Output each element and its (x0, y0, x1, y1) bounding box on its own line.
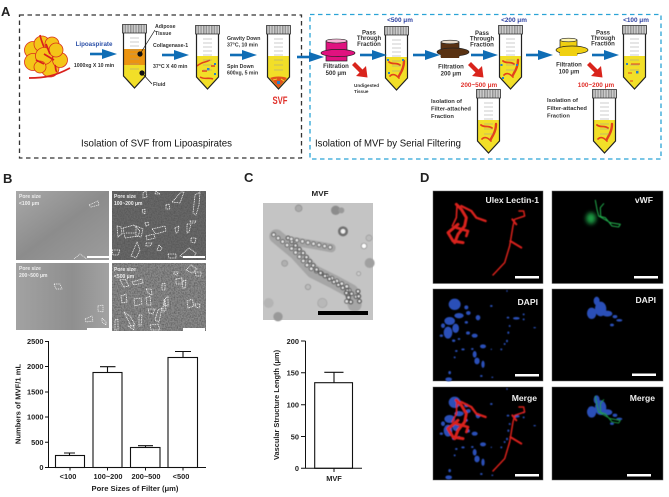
schematic step labels (74, 17, 649, 120)
value axis labels: 200 (287, 337, 299, 346)
value axis labels: 100 (287, 400, 299, 410)
image title: MVF (312, 189, 329, 198)
micrograph: pore size under 100 (16, 191, 109, 260)
schematic step labels: 100~200 μm (578, 82, 615, 89)
tube: SVF pellet (266, 26, 290, 89)
micrograph: pore size 200-500 (16, 263, 109, 330)
value axis labels: 50 (291, 432, 299, 441)
micrograph: pore size 100-200: 100~200 μm (114, 201, 143, 207)
schematic step labels: 600xg, 5 min (227, 70, 258, 76)
schematic step labels: Lipoaspirate (76, 41, 113, 48)
schematic step labels: Filter-attached (431, 106, 471, 112)
image: vWF: vWF (635, 195, 653, 205)
schematic step labels: Filtration (438, 64, 464, 70)
icon: 200 um filter (437, 40, 469, 58)
y axis title: Numbers of MVF/1 mL (14, 364, 22, 444)
schematic step labels: SVF (272, 95, 288, 107)
heading: isolation of MVF: Isolation of MVF by Serial Filtering (315, 138, 461, 150)
panel label C: C (244, 170, 254, 185)
tube: collagenase digestion (196, 26, 220, 89)
micrograph: pore size 200-500: 200~500 μm (19, 273, 48, 279)
panel: isolation of SVF (20, 15, 302, 158)
schematic step labels: 1000xg X 10 min (74, 63, 114, 69)
image: Ulex Lectin-1: Ulex Lectin-1 (486, 195, 539, 205)
value axis labels (27, 337, 44, 472)
schematic step labels: Gravity Down (227, 36, 260, 42)
schematic step labels: Tissue (155, 31, 171, 37)
micrograph: pore size under 500 (112, 263, 206, 331)
image: Ulex Lectin-1 (433, 191, 543, 284)
schematic step labels: Pass (475, 31, 490, 37)
panel label A: A (1, 4, 11, 19)
category labels: 100~200 (94, 472, 122, 481)
image: merge left (433, 387, 543, 480)
schematic step labels: Fraction (431, 114, 454, 120)
schematic step labels: Adipose (155, 24, 176, 30)
schematic step labels: Through (591, 36, 615, 42)
schematic step labels: Fraction (547, 114, 570, 120)
category labels: <100 (60, 472, 76, 481)
axes (301, 341, 362, 472)
value axis labels: 500 (31, 438, 44, 447)
schematic step labels: Pass (596, 30, 611, 36)
schematic step labels: <500 μm (387, 17, 413, 24)
micrograph: pore size 100-200 (112, 191, 206, 260)
schematic step labels: 100 μm (559, 70, 579, 76)
bars (56, 352, 198, 468)
value axis labels (287, 337, 299, 473)
category labels: <500 (173, 472, 189, 481)
panel A: schematic (1, 4, 661, 159)
image: vWF (552, 191, 663, 284)
category labels: 200~500 (132, 472, 160, 481)
image: DAPI left (433, 289, 543, 381)
schematic step labels: Through (357, 36, 381, 42)
schematic step labels: Fraction (591, 42, 615, 48)
icon: adipose tissue cluster (24, 35, 70, 78)
icon: 500 um filter (321, 39, 355, 61)
panel B: micrographs and bar chart (3, 171, 206, 493)
schematic step labels: <200 μm (501, 17, 527, 24)
schematic step labels: Filtration (556, 62, 582, 68)
tube: 100-200 um fraction (592, 90, 616, 153)
schematic step labels: 200~500 μm (461, 82, 498, 89)
schematic step labels: Collagenase-1 (153, 43, 188, 49)
schematic step labels: Filter-attached (547, 106, 587, 112)
image: merge right (552, 387, 663, 480)
bar chart: vascular structure length (272, 337, 362, 483)
tube: 200-500 um fraction (476, 90, 500, 153)
value axis labels: 0 (39, 463, 44, 472)
micrograph: pore size under 500: Pore size (114, 267, 136, 273)
schematic step labels: Fluid (153, 82, 165, 88)
schematic step labels: <100 μm (623, 17, 649, 24)
value axis labels: 1000 (27, 412, 44, 422)
tube: layered lipoaspirate (122, 24, 155, 88)
micrograph: pore size 100-200: Pore size (114, 194, 136, 200)
schematic step labels: Through (470, 36, 494, 42)
value axis labels: 0 (295, 464, 299, 473)
panel C: MVF image and chart (244, 170, 375, 483)
schematic step labels: Fraction (470, 42, 494, 48)
schematic step labels: 200 μm (441, 72, 461, 78)
panel label B: B (3, 171, 12, 186)
panel label D: D (420, 170, 429, 185)
value axis labels: 150 (287, 368, 299, 378)
category labels (60, 472, 189, 481)
value axis labels: 1500 (27, 388, 44, 396)
schematic step labels: Tissue (354, 89, 369, 94)
tube: under 500 um (384, 26, 408, 90)
image: DAPI right: DAPI (635, 295, 656, 305)
schematic step labels: 37°C, 10 min (227, 42, 258, 48)
y axis title: Vascular Structure Length (μm) (272, 349, 281, 460)
icon: 100 um filter (556, 38, 588, 56)
micrograph: MVF (263, 203, 375, 321)
panel D: immunofluorescence (420, 170, 663, 480)
axes (45, 341, 206, 470)
value axis labels: 2000 (27, 362, 44, 371)
heading: isolation of SVF: Isolation of SVF from Lipoaspirates (81, 138, 232, 150)
schematic step labels: 500 μm (326, 71, 346, 77)
blue process arrows (90, 49, 619, 62)
schematic step labels: 37°C X 40 min (153, 64, 187, 70)
value axis labels: 2500 (27, 337, 44, 346)
schematic step labels: Isolation of (431, 99, 462, 105)
schematic step labels: Fraction (357, 42, 381, 48)
schematic step labels: Undigested (354, 83, 379, 88)
x axis title: Pore Sizes of Filter (μm) (92, 484, 179, 493)
micrograph: pore size 200-500: Pore size (19, 266, 41, 272)
image: DAPI left: DAPI (517, 297, 538, 307)
tube: under 100 um (622, 26, 646, 89)
bar chart: MVF counts by pore size (14, 337, 206, 493)
category label: MVF (326, 474, 342, 483)
schematic step labels: Filtration (323, 64, 349, 70)
schematic step labels: Pass (362, 30, 377, 36)
micrograph: pore size under 500: <500 μm (114, 274, 135, 280)
panel: isolation of MVF (310, 14, 661, 159)
micrograph: pore size under 100: <100 μm (19, 201, 40, 207)
micrograph: pore size under 100: Pore size (19, 194, 41, 200)
image: merge right: Merge (630, 393, 655, 403)
image: merge left: Merge (512, 393, 537, 403)
red filter-attached arrows (352, 62, 602, 78)
bar with error bar (315, 372, 352, 468)
schematic step labels: Spin Down (227, 64, 254, 70)
image: DAPI right (552, 289, 663, 381)
tube: under 200 um (498, 26, 522, 89)
schematic step labels: Isolation of (547, 98, 578, 104)
